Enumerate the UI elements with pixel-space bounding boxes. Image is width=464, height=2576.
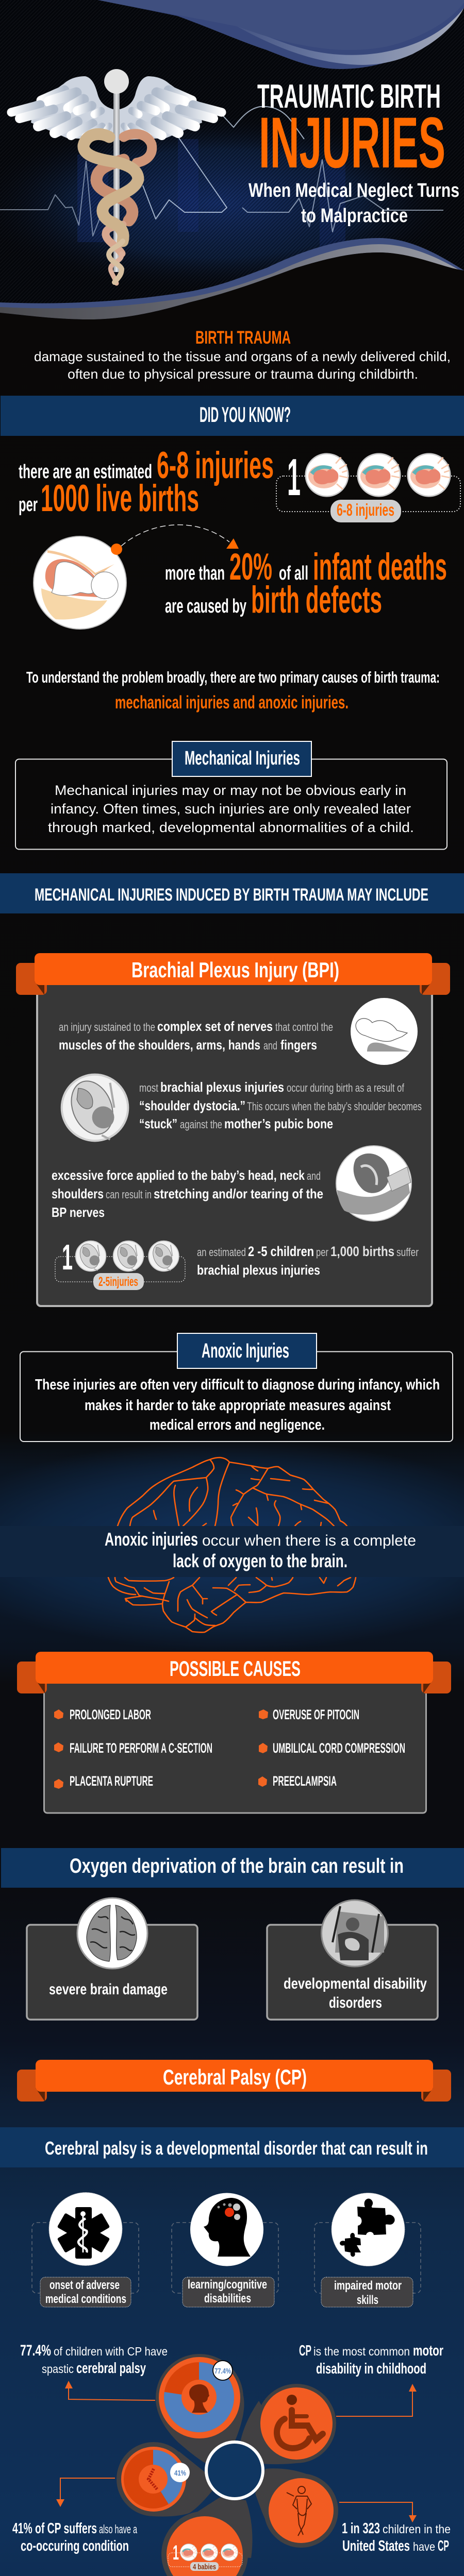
panel: mechanical injuries [15, 741, 447, 849]
text: excessive force: excessive force applied to the baby’s head, neck [52, 1167, 305, 1183]
text: complex set of nerves: and [263, 1039, 277, 1052]
image: baby in womb grey [62, 1075, 128, 1141]
icon: wheelchair [277, 2395, 323, 2448]
icon group: 1 in 1000 fetus graphic: 6-8 injuries [337, 500, 394, 519]
item: onset of adverse medical conditions: medical conditions [45, 2292, 126, 2306]
text: most common motor disability: CP [299, 2343, 311, 2359]
text: 77.4% of children: spastic [42, 2362, 74, 2376]
bullet list [54, 1707, 405, 1789]
stat: 20% of infant deaths: more than [165, 563, 225, 584]
arrow: to most common text [336, 2384, 417, 2416]
image: child in wheelchair [333, 1906, 384, 1960]
text: complex set of nerves: fingers [280, 1037, 317, 1053]
text: 41% co-occuring condition [12, 2520, 137, 2554]
panel: mechanical injuries: through marked, developmental abnormalities of a child. [48, 820, 414, 835]
panel: anoxic injuries: Anoxic Injuries [202, 1340, 289, 1362]
bullet list: PLACENTA RUPTURE [70, 1773, 153, 1789]
text: complex set of nerves: that control the [275, 1021, 333, 1033]
stat: 20% of infant deaths [165, 546, 447, 621]
snakes [84, 134, 152, 283]
text: shoulder dystocia: “stuck” [139, 1116, 177, 1131]
stat: 6-8 injuries per 1000: 1000 live births [41, 478, 199, 519]
bullet list: OVERUSE OF PITOCIN [273, 1707, 359, 1722]
item: onset of adverse medical conditions [32, 2193, 139, 2307]
text: 2-5 children per 1000 births: 2 -5 children [248, 1244, 314, 1259]
text: 77.4% of children: 77.4% [20, 2342, 51, 2359]
ECG line [0, 107, 443, 236]
icon: brain top view [87, 1905, 137, 1961]
pin: 4 babies [161, 2497, 253, 2576]
pin: 77.4% [156, 2354, 244, 2464]
text: 77.4% of children: of children with CP have [54, 2345, 168, 2358]
icon: head with gears [204, 2198, 251, 2257]
text block: birth trauma definition: often due to physical pressure or trauma during childbirth. [68, 366, 418, 382]
arrow: to 77.4% text [65, 2381, 155, 2400]
card: severe brain damage [27, 1898, 197, 2020]
icon: star of life [57, 2207, 110, 2259]
text block: two primary causes [26, 668, 440, 713]
image: delivery illustration [336, 1146, 411, 1221]
pin: child figure [255, 2468, 338, 2548]
text: excessive force: stretching and/or tearing of the [154, 1186, 323, 1201]
text: excessive force: shoulders [52, 1186, 104, 1201]
brain glow background [0, 1440, 464, 1651]
text block: birth trauma definition [34, 328, 451, 382]
pin: 41%: 41% [174, 2469, 186, 2478]
callout: anoxic injuries definition: Anoxic injuries [105, 1529, 198, 1550]
item: learning cognitive disabilities [172, 2193, 278, 2307]
bullet list: FAILURE TO PERFORM A C-SECTION [70, 1740, 212, 1756]
card: developmental disability disorders [267, 1900, 438, 2020]
top swoosh [98, 0, 464, 69]
text: most common motor disability: is the most common [313, 2345, 410, 2358]
icon group: 1 in 1000 fetus graphic: 1 [287, 449, 301, 506]
callout: anoxic injuries definition [0, 1526, 464, 1577]
ribbon: cerebral palsy [17, 2060, 451, 2102]
panel: brachial plexus injury [16, 953, 450, 1306]
icon: caduceus [11, 69, 222, 283]
text: excessive force [52, 1167, 323, 1220]
text: 1 in 323 children: CP [438, 2538, 449, 2554]
card: severe brain damage: severe brain damage [49, 1981, 168, 1998]
text: 1 in 323 children [342, 2520, 451, 2554]
arrow: to 41% text [56, 2478, 115, 2507]
text: excessive force: BP nerves [52, 1205, 105, 1220]
text: 1 in 323 children: United States [342, 2538, 410, 2554]
text: 77.4% of children [20, 2342, 168, 2377]
stat: 6-8 injuries per 1000 [19, 445, 274, 519]
text: 2-5 children per 1000 births: 1,000 births [330, 1244, 394, 1259]
stat: 6-8 injuries per 1000: there are an estimated [19, 461, 152, 483]
band: cerebral palsy definition [0, 2127, 464, 2167]
panel: possible causes [17, 1652, 451, 1813]
text: 41% co-occuring condition: co-occuring condition [21, 2538, 129, 2554]
staff [113, 92, 120, 272]
text block: birth trauma definition: BIRTH TRAUMA [195, 328, 291, 348]
icon: child figure [287, 2486, 311, 2536]
icon group: 2-5 injuries: 1 [62, 1237, 73, 1277]
item: onset of adverse medical conditions: onset of adverse [49, 2278, 120, 2292]
text: shoulder dystocia [139, 1079, 422, 1131]
text: 2-5 children per 1000 births: suffer [396, 1246, 419, 1259]
title: to Malpractice [301, 205, 408, 227]
pin: 41% [117, 2442, 213, 2516]
stat: 20% of infant deaths: are caused by [165, 596, 246, 617]
text: 2-5 children per 1000 births: brachial plexus injuries [197, 1262, 320, 1278]
item: impaired motor skills: impaired motor [334, 2279, 402, 2293]
text block: birth trauma definition: damage sustained to the tissue and organs of a newly delivered child, [34, 349, 451, 364]
band: did you know [1, 396, 464, 436]
callout: anoxic injuries definition: occur when there is a complete [202, 1532, 416, 1549]
pin: 4 babies: 4 babies [193, 2563, 216, 2571]
bullet list: PREECLAMPSIA [273, 1773, 337, 1789]
band: oxygen deprivation [1, 1848, 464, 1888]
title [248, 77, 459, 227]
text: most common motor disability: motor [413, 2343, 443, 2359]
icon: puzzle pieces [340, 2199, 395, 2257]
center ring [206, 2442, 263, 2499]
pin: wheelchair [240, 2384, 336, 2464]
card: developmental disability disorders: developmental disability [284, 1975, 427, 1992]
text: 1 in 323 children: children in the [383, 2522, 451, 2536]
icon: red spine mark [148, 2469, 157, 2489]
text: 2-5 children per 1000 births: per [316, 1246, 328, 1259]
hero banner [0, 0, 464, 330]
item: impaired motor skills: skills [357, 2293, 378, 2307]
arrow: to 1 in 323 text [339, 2502, 417, 2522]
callout: anoxic injuries definition: lack of oxygen to the brain. [173, 1550, 347, 1571]
icon group: 2-5 injuries [55, 1237, 185, 1290]
heading: Brachial Plexus Injury (BPI) [131, 958, 339, 982]
band: mechanical injuries may include [0, 873, 464, 913]
pin: 4 babies: 1 [173, 2541, 179, 2564]
item: learning cognitive disabilities: learning/cognitive [188, 2278, 267, 2292]
text: shoulder dystocia: against the [180, 1118, 222, 1131]
chart: cerebral palsy stats cluster [117, 2354, 338, 2576]
panel: mechanical injuries: Mechanical injuries may or may not be obvious early in [55, 783, 406, 798]
panel: anoxic injuries: makes it harder to take appropriate measures against [85, 1397, 391, 1414]
text: 77.4% of children: cerebral palsy [76, 2360, 146, 2377]
icon group: 1 in 1000 fetus graphic [276, 449, 460, 522]
text: 2-5 children per 1000 births: an estimated [197, 1246, 246, 1259]
text: excessive force: and [307, 1170, 321, 1182]
text: shoulder dystocia: most [139, 1081, 158, 1094]
text: 1 in 323 children: have [413, 2540, 435, 2553]
stat: 6-8 injuries per 1000: per [19, 494, 38, 516]
image: baby lying down [351, 998, 418, 1065]
text: 41% co-occuring condition: also have a [99, 2522, 137, 2536]
text: shoulder dystocia: occur during birth as a result of [287, 1081, 405, 1094]
panel: mechanical injuries: Mechanical Injuries [185, 748, 300, 769]
icon: baby in womb [34, 536, 126, 629]
text: shoulder dystocia: “shoulder dystocia.” [139, 1098, 245, 1113]
text: 41% co-occuring condition: 41% of CP suffers [12, 2520, 97, 2537]
stat: 6-8 injuries per 1000: 6-8 injuries [157, 445, 274, 486]
icon: head [189, 2384, 209, 2413]
item: learning cognitive disabilities: disabilities [204, 2292, 251, 2306]
card: developmental disability disorders: disorders [329, 1994, 382, 2011]
text: complex set of nerves [59, 1019, 333, 1053]
panel: mechanical injuries: infancy. Often times, such injuries are only revealed later [51, 801, 411, 817]
text: most common motor disability [299, 2343, 443, 2377]
text: complex set of nerves: muscles of the shoulders, arms, hands [59, 1037, 260, 1053]
ribbon: cerebral palsy: Cerebral Palsy (CP) [163, 2065, 307, 2089]
panel: anoxic injuries [20, 1333, 453, 1442]
panel: anoxic injuries: medical errors and negligence. [150, 1417, 325, 1433]
text: 2-5 children per 1000 births [197, 1244, 419, 1278]
text: excessive force: can result in [106, 1188, 152, 1201]
text: shoulder dystocia: mother’s pubic bone [224, 1116, 333, 1131]
text: complex set of nerves: complex set of nerves [157, 1019, 273, 1034]
heading: POSSIBLE CAUSES [170, 1656, 301, 1681]
illustration: brain [108, 1458, 356, 1632]
lower hero wave [0, 238, 464, 319]
text block: two primary causes: mechanical injuries and anoxic injuries. [115, 692, 349, 713]
arrow: dashed curve [111, 525, 239, 555]
text: complex set of nerves: an injury sustained to the [59, 1021, 155, 1033]
pin: 77.4%: 77.4% [214, 2367, 231, 2376]
text: 1 in 323 children: 1 in 323 [342, 2520, 380, 2537]
text: shoulder dystocia: brachial plexus injuries [160, 1079, 284, 1095]
band: did you know: DID YOU KNOW? [200, 402, 291, 427]
stat: 20% of infant deaths: 20% [229, 546, 272, 588]
bullet list: PROLONGED LABOR [70, 1707, 151, 1722]
item: impaired motor skills [314, 2193, 421, 2307]
stat: 20% of infant deaths: of all [279, 563, 308, 584]
icon group: 2-5 injuries: 2-5injuries [98, 1275, 138, 1289]
